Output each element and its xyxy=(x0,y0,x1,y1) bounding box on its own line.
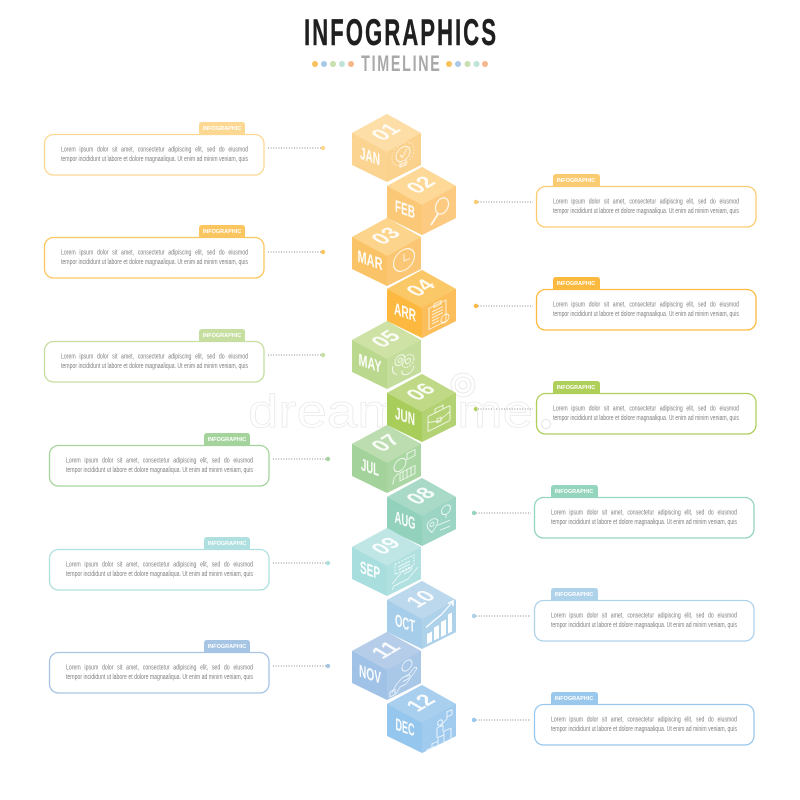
cube: 05 MAY: MAY xyxy=(358,349,382,377)
card: June xyxy=(474,381,756,434)
card: May: tempor incididunt ut labore et dolore magnaaliqua. Ut enim ad minim veniam, quis xyxy=(61,363,248,370)
card: June: Lorem ipsum dolor sit amet, consectetur adipiscing elit, sed do eiusmod xyxy=(553,406,739,412)
card: March xyxy=(44,225,325,278)
card: October xyxy=(472,588,754,641)
cube: 11 NOV xyxy=(352,632,421,700)
card: February xyxy=(474,174,756,227)
card: December: INFOGRAPHIC xyxy=(555,696,593,702)
card: November xyxy=(50,640,330,693)
card: September: tempor incididunt ut labore et dolore magnaaliqua. Ut enim ad minim veniam, quis xyxy=(66,571,253,578)
cube: 02 FEB: 02 xyxy=(400,173,441,197)
cube: 03 MAR: MAR xyxy=(358,246,383,274)
card: September: INFOGRAPHIC xyxy=(208,541,246,547)
card: April: tempor incididunt ut labore et dolore magnaaliqua. Ut enim ad minim veniam, quis xyxy=(553,311,739,318)
card: November: Lorem ipsum dolor sit amet, consectetur adipiscing elit, sed do eiusmod xyxy=(66,664,253,672)
card: September: Lorem ipsum dolor sit amet, consectetur adipiscing elit, sed do eiusmod xyxy=(66,562,253,568)
watermark: dreamstime xyxy=(248,385,533,437)
cube: 01 JAN: 01 xyxy=(365,120,406,144)
cube: 11 NOV: 11 xyxy=(365,638,406,662)
cube: 06 JUN: 06 xyxy=(400,380,441,404)
card: February: INFOGRAPHIC xyxy=(557,178,595,184)
card: December: Lorem ipsum dolor sit amet, consectetur adipiscing elit, sed do eiusmod xyxy=(551,716,737,724)
cube: 12 DEC: 12 xyxy=(400,691,441,715)
cube: 09 SEP xyxy=(352,528,421,596)
card: October: tempor incididunt ut labore et dolore magnaaliqua. Ut enim ad minim veniam, quis xyxy=(551,622,737,629)
card: January: tempor incididunt ut labore et dolore magnaaliqua. Ut enim ad minim veniam, quis xyxy=(61,156,248,163)
cube: 01 JAN xyxy=(352,114,421,182)
card: May: INFOGRAPHIC xyxy=(203,333,241,339)
card: November: tempor incididunt ut labore et dolore magnaaliqua. Ut enim ad minim veniam, quis xyxy=(66,674,253,681)
card: April xyxy=(474,277,756,330)
cube: 04 ARR xyxy=(387,270,456,338)
card: July: INFOGRAPHIC xyxy=(208,437,246,443)
cube: 11 NOV: NOV xyxy=(359,661,381,688)
cube: 10 OCT xyxy=(387,581,456,649)
card: October: INFOGRAPHIC xyxy=(555,592,593,598)
right subtitle dots xyxy=(446,61,488,67)
cube: 08 AUG xyxy=(387,478,456,546)
cube: 01 JAN: JAN xyxy=(360,143,380,169)
cube: 03 MAR xyxy=(352,218,421,286)
cube: 06 JUN: JUN xyxy=(395,403,415,429)
cube: 06 JUN xyxy=(387,374,456,442)
card: July: Lorem ipsum dolor sit amet, consectetur adipiscing elit, sed do eiusmod xyxy=(66,458,253,464)
cube: 04 ARR: 04 xyxy=(400,275,441,300)
card: August xyxy=(472,485,754,538)
cube: 08 AUG: 08 xyxy=(400,484,441,508)
cube: 05 MAY xyxy=(352,321,421,389)
card: February: tempor incididunt ut labore et dolore magnaaliqua. Ut enim ad minim veniam, quis xyxy=(553,208,739,215)
cube: 02 FEB xyxy=(387,167,456,235)
card: December xyxy=(472,692,754,745)
card: June: tempor incididunt ut labore et dolore magnaaliqua. Ut enim ad minim veniam, quis xyxy=(553,415,739,422)
subtitle: TIMELINE xyxy=(361,51,440,76)
card: May xyxy=(44,329,325,382)
card: April: Lorem ipsum dolor sit amet, consectetur adipiscing elit, sed do eiusmod xyxy=(553,302,739,308)
cube: 07 JUL: 07 xyxy=(365,431,406,455)
card: April: INFOGRAPHIC xyxy=(557,281,595,287)
card: October: Lorem ipsum dolor sit amet, consectetur adipiscing elit, sed do eiusmod xyxy=(551,612,737,620)
cube: 07 JUL xyxy=(352,425,421,493)
cube: 03 MAR: 03 xyxy=(365,224,406,248)
card: November: INFOGRAPHIC xyxy=(208,644,246,650)
card: August: INFOGRAPHIC xyxy=(555,489,593,495)
card: September xyxy=(50,537,330,590)
card: March: tempor incididunt ut labore et dolore magnaaliqua. Ut enim ad minim veniam, quis xyxy=(61,259,248,266)
cube: 09 SEP: SEP xyxy=(360,557,380,583)
title: INFOGRAPHICS xyxy=(304,12,496,53)
watermark xyxy=(248,373,550,437)
cube: 12 DEC: DEC xyxy=(396,714,415,740)
card: December: tempor incididunt ut labore et dolore magnaaliqua. Ut enim ad minim veniam, quis xyxy=(551,726,737,733)
cube: 05 MAY: 05 xyxy=(365,327,406,351)
cube: 10 OCT: 10 xyxy=(400,587,441,611)
cube: 04 ARR: ARR xyxy=(394,299,416,326)
cube: 10 OCT: OCT xyxy=(395,610,415,636)
card: August: Lorem ipsum dolor sit amet, consectetur adipiscing elit, sed do eiusmod xyxy=(551,510,737,516)
cube: 08 AUG: AUG xyxy=(394,507,416,534)
left subtitle dots xyxy=(312,61,354,67)
cube: 09 SEP: 09 xyxy=(365,534,406,558)
card: June: INFOGRAPHIC xyxy=(557,385,595,391)
card: August: tempor incididunt ut labore et dolore magnaaliqua. Ut enim ad minim veniam, quis xyxy=(551,519,737,526)
card: January: INFOGRAPHIC xyxy=(203,126,241,132)
card: February: Lorem ipsum dolor sit amet, consectetur adipiscing elit, sed do eiusmod xyxy=(553,198,739,206)
card: March: Lorem ipsum dolor sit amet, consectetur adipiscing elit, sed do eiusmod xyxy=(61,250,248,256)
card: March: INFOGRAPHIC xyxy=(203,229,241,235)
card: January xyxy=(44,122,325,175)
cube: 02 FEB: FEB xyxy=(395,196,415,222)
card: July xyxy=(50,433,330,486)
cube: 07 JUL: JUL xyxy=(361,454,379,480)
cube: 12 DEC xyxy=(387,685,456,753)
card: January: Lorem ipsum dolor sit amet, consectetur adipiscing elit, sed do eiusmod xyxy=(61,146,248,154)
card: May: Lorem ipsum dolor sit amet, consectetur adipiscing elit, sed do eiusmod xyxy=(61,354,248,360)
card: July: tempor incididunt ut labore et dolore magnaaliqua. Ut enim ad minim veniam, quis xyxy=(66,467,253,474)
